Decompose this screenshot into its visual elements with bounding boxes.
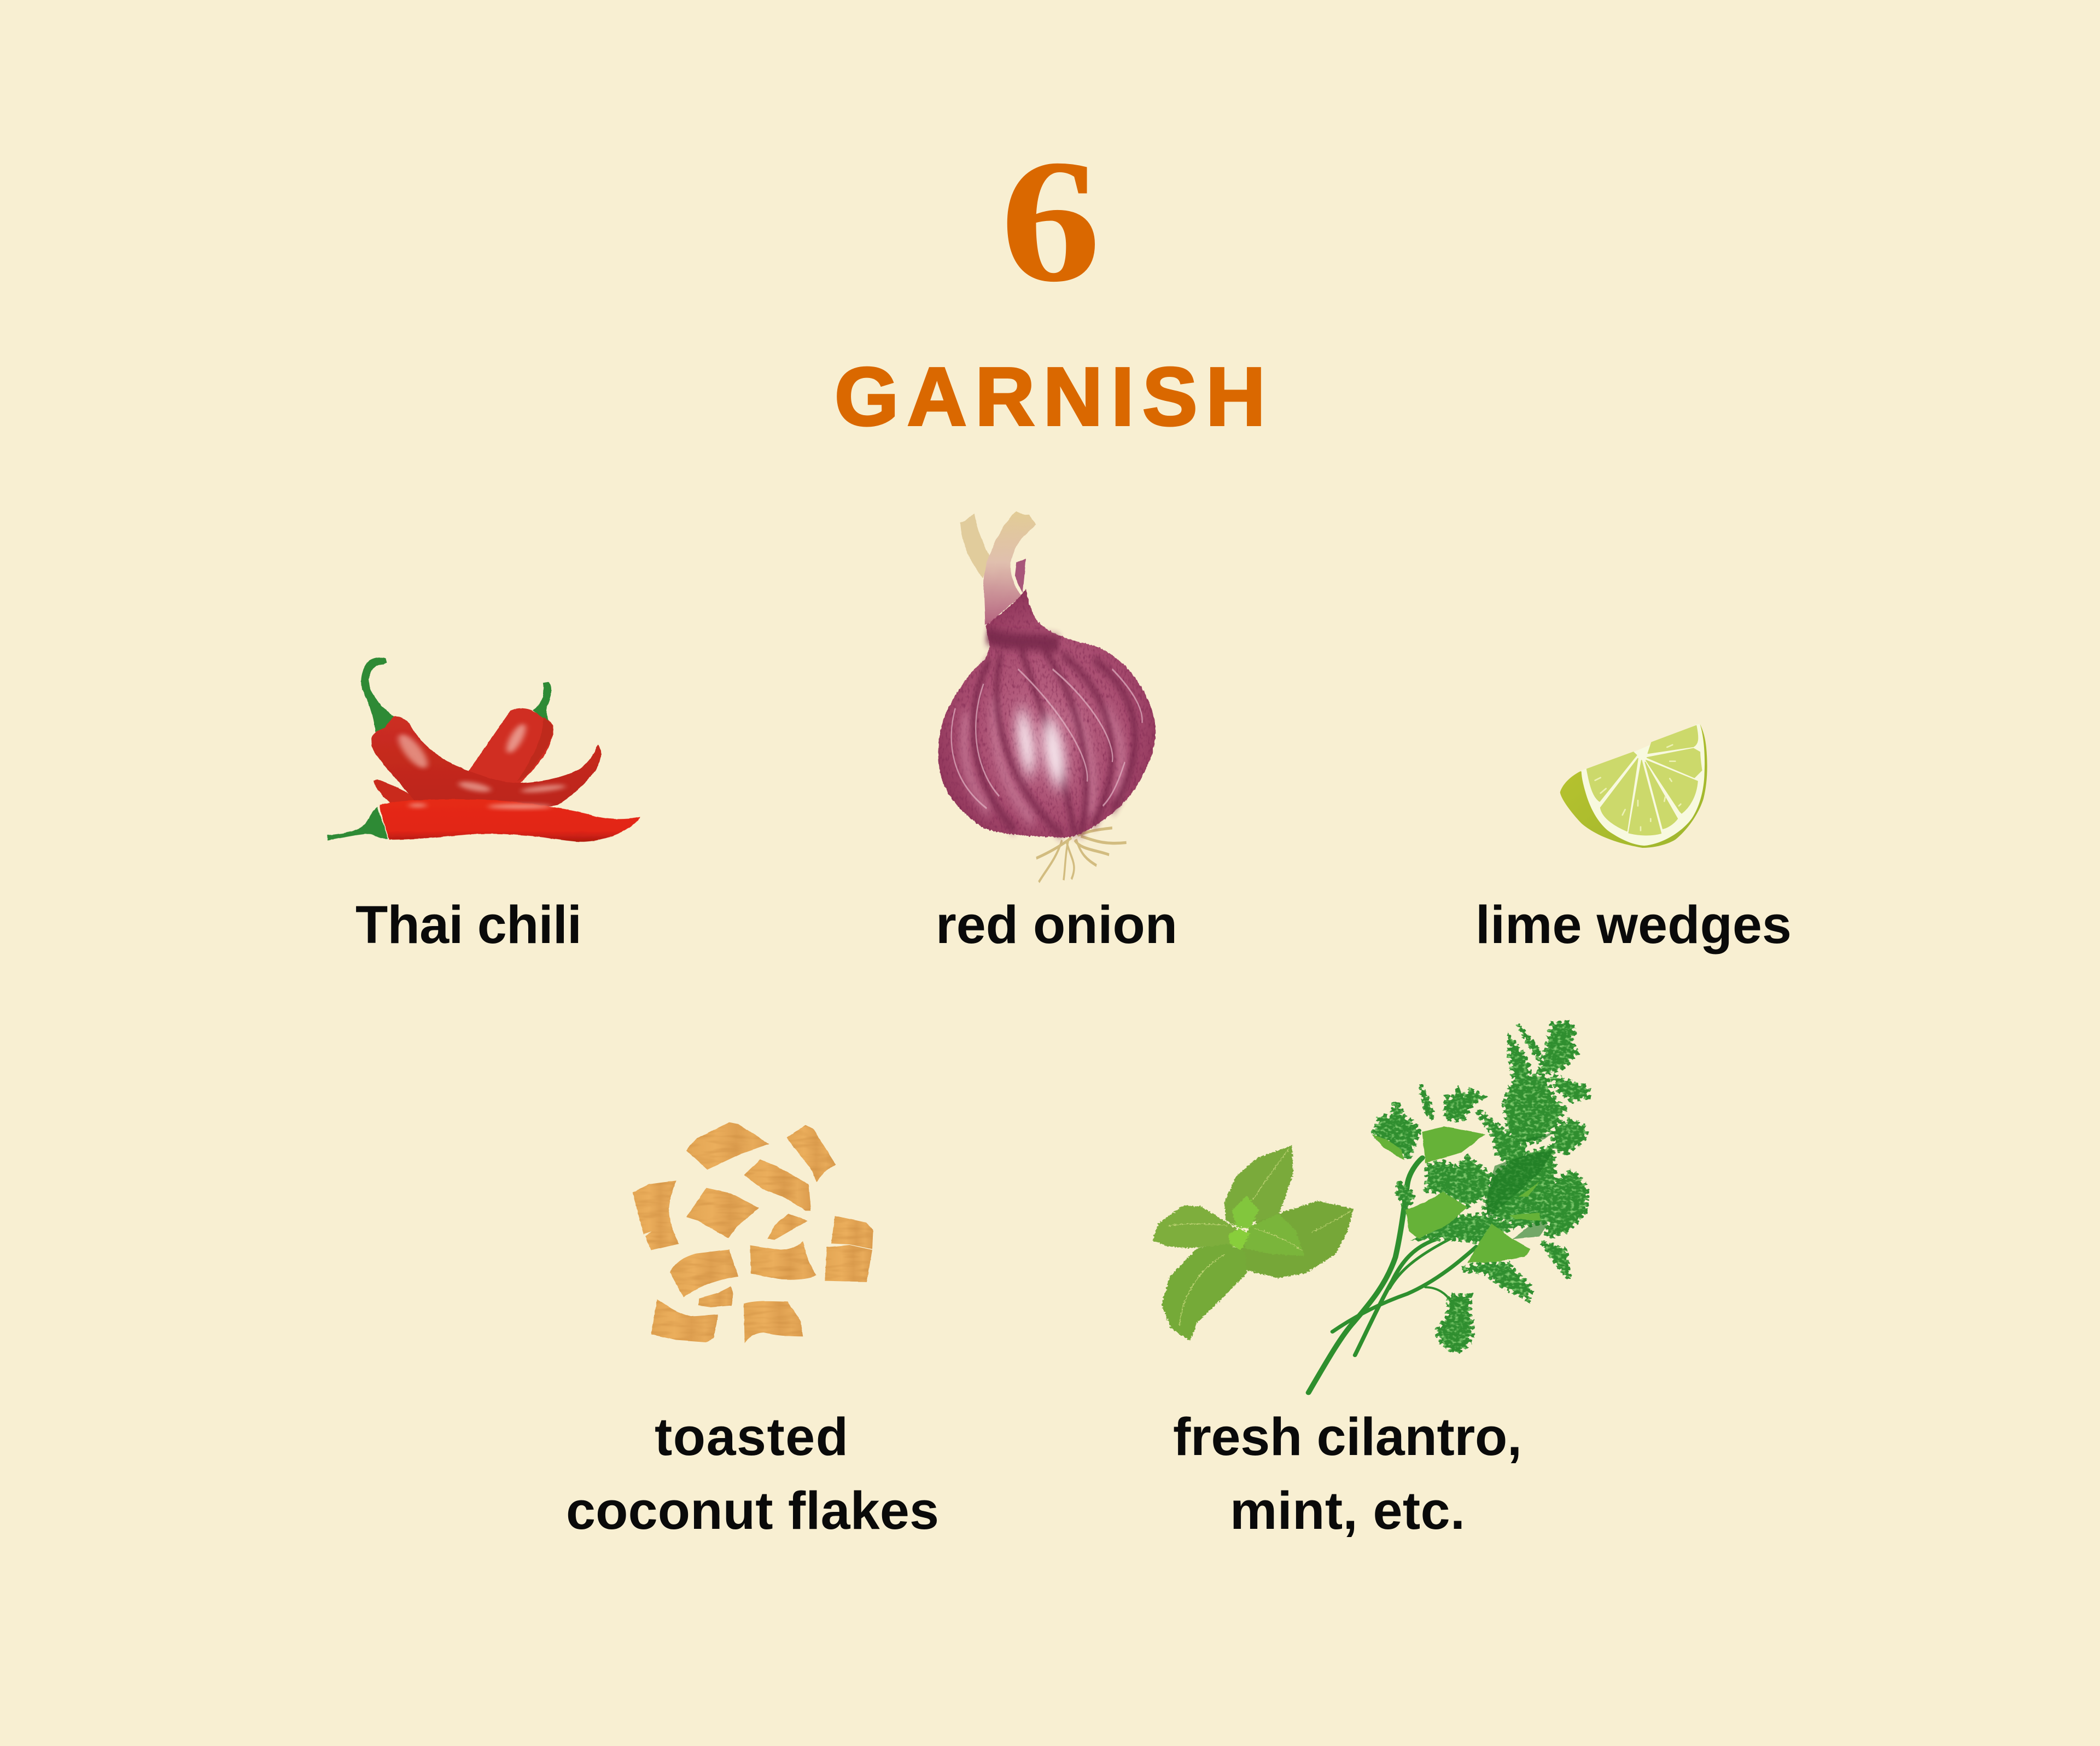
cilantro frond mass xyxy=(1374,1023,1588,1352)
label: lime wedges: lime wedges xyxy=(1475,895,1792,955)
icon: mint leaves xyxy=(1152,1145,1354,1341)
front chili xyxy=(327,799,641,842)
label: Thai chili: Thai chili xyxy=(355,895,582,955)
label: toasted coconut flakes xyxy=(566,1407,939,1540)
far chili tail xyxy=(374,779,420,808)
icon: red onion xyxy=(938,512,1156,882)
back chili xyxy=(469,682,553,789)
onion highlights xyxy=(1013,706,1070,791)
mint left leaf xyxy=(1152,1206,1239,1249)
label: fresh cilantro, mint, etc. xyxy=(1173,1407,1522,1540)
cilantro dark shadows xyxy=(1485,1132,1558,1239)
mint small leaf xyxy=(1232,1196,1259,1229)
mint small lower leaf xyxy=(1228,1229,1250,1250)
onion skin lines xyxy=(952,669,1142,808)
lime rind xyxy=(1560,724,1707,848)
onion bulb xyxy=(938,589,1156,837)
icon: toasted coconut flakes xyxy=(633,1122,873,1343)
icon: cilantro sprig xyxy=(1309,1023,1588,1393)
onion ribs xyxy=(973,635,1135,835)
mint centre leaf xyxy=(1244,1214,1304,1256)
label: toasted coconut flakes: toasted xyxy=(655,1407,848,1466)
label: fresh cilantro, mint, etc.: fresh cilantro, xyxy=(1173,1407,1522,1466)
mint lower leaf xyxy=(1162,1244,1247,1341)
label: red onion: red onion xyxy=(936,895,1177,955)
lime pith xyxy=(1582,724,1705,846)
mint top leaf xyxy=(1224,1145,1293,1226)
onion stem xyxy=(960,512,1036,625)
lime segments xyxy=(1587,726,1702,835)
cilantro stems xyxy=(1309,1158,1477,1393)
mint veins xyxy=(1168,1149,1350,1325)
step number: 6 xyxy=(1000,123,1101,318)
flake group xyxy=(633,1122,873,1343)
lime pulp flecks xyxy=(1595,745,1681,830)
cilantro light leaves xyxy=(1372,1126,1541,1262)
main curved chili xyxy=(361,657,601,809)
icon: chili peppers xyxy=(327,657,641,842)
heading: GARNISH xyxy=(835,350,1265,443)
main chili highlights xyxy=(393,731,566,794)
label: fresh cilantro, mint, etc.: mint, etc. xyxy=(1230,1481,1465,1540)
front chili highlights xyxy=(409,804,552,809)
back chili highlight xyxy=(503,722,529,754)
label: toasted coconut flakes: coconut flakes xyxy=(566,1481,939,1540)
onion roots xyxy=(1036,828,1127,882)
onion light bands xyxy=(964,699,1122,820)
icon: lime wedge xyxy=(1560,724,1707,848)
mint right leaf xyxy=(1239,1201,1354,1278)
